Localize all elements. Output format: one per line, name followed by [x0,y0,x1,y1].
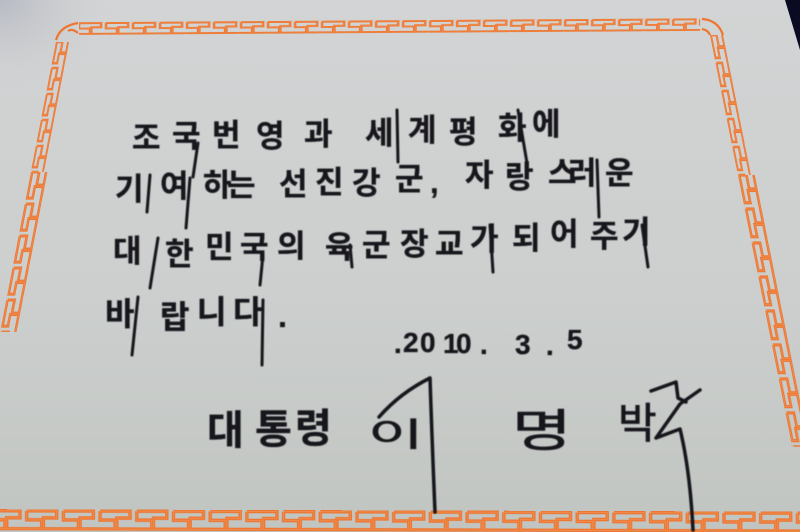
border: rounded corners [56,19,723,40]
border: left edge upper [31,42,69,172]
border: right edge lower [738,175,800,447]
border: bottom edge [0,509,800,532]
line 3: 대한민국의육군장교가되어주기 [113,215,651,272]
line 2: 기여하는선진강군,자랑스러운 [115,156,634,207]
signature: surname: 이 [368,417,424,453]
handwritten message [105,107,700,530]
border: top edge [79,18,700,35]
border: right edge upper [710,35,751,175]
signature title: 대통령 [207,407,332,453]
dark table corner [785,0,800,50]
line 4: 바랍니다. [105,294,287,335]
signature: given name: 명 [512,406,572,456]
pen flourishes [132,110,700,530]
signature: family character: 박 [618,400,657,447]
line 1: 조국번영과세계평화에 [132,107,561,156]
date: .2010. 3. 5 [394,324,583,361]
border: left edge lower [0,172,47,332]
